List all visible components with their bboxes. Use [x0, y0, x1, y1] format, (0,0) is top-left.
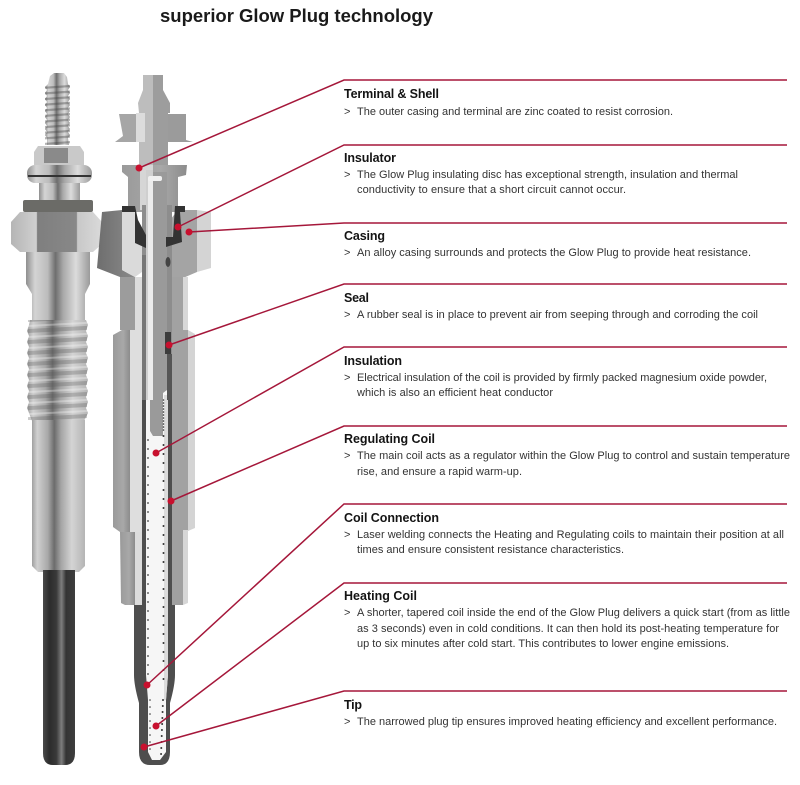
text block: Casing: Casing [344, 229, 385, 243]
text block: Seal: A rubber seal is in place to prevent air from seeping through and corroding the coil [357, 309, 758, 321]
lower body right [172, 530, 188, 605]
upper body left [120, 277, 142, 330]
rubber seal [165, 332, 171, 354]
threaded terminal stud [45, 73, 70, 145]
leader: Insulator [174, 145, 787, 230]
text block: Terminal & Shell [344, 87, 673, 118]
text block: Insulation: > [344, 372, 350, 384]
casing hex right [166, 210, 211, 278]
text block: Insulation: Electrical insulation of the coil is provided by firmly packed magnesium oxide powder, [357, 372, 767, 384]
text block: Heating Coil: up to six minutes after cold start. This contributes to lower engine emissions. [357, 638, 729, 650]
wide body left [113, 330, 142, 533]
text block: Insulation: Insulation [344, 354, 402, 368]
text block: Terminal & Shell: > [344, 106, 350, 118]
heating coil [150, 700, 163, 756]
leader: Casing [186, 223, 787, 236]
text block: Heating Coil: > [344, 607, 350, 619]
heater tube wall [134, 400, 175, 765]
text block: Coil Connection [344, 511, 784, 556]
text block: Heating Coil: A shorter, tapered coil inside the end of the Glow Plug delivers a quick start (from as little [357, 607, 790, 619]
chrome body [26, 252, 90, 320]
upper body right [172, 277, 188, 330]
inner channel [142, 205, 172, 605]
leader: Regulating Coil [168, 426, 787, 504]
wide body right [172, 330, 195, 531]
text block: Terminal & Shell: The outer casing and terminal are zinc coated to resist corrosion. [357, 106, 673, 118]
text block: Heating Coil: as 3 seconds) even in cold conditions. It can then hold its post-heating temperature for [357, 623, 779, 635]
casing hex left [97, 210, 135, 277]
text block: Insulator: The Glow Plug insulating disc has exceptional strength, insulation and thermal [357, 169, 738, 181]
regulating coil [148, 400, 164, 680]
text block: Heating Coil [344, 589, 790, 650]
text block: Tip [344, 698, 777, 728]
text block: Seal: > [344, 309, 350, 321]
text block: Tip: The narrowed plug tip ensures improved heating efficiency and excellent performance. [357, 716, 777, 728]
o-ring [166, 257, 170, 267]
magnesium oxide powder fill [146, 390, 168, 760]
text block: Casing: An alloy casing surrounds and protects the Glow Plug to provide heat resistance. [357, 247, 751, 259]
title: superior Glow Plug technology [160, 5, 434, 26]
text block: Regulating Coil [344, 432, 790, 478]
external view of glow plug [11, 73, 102, 765]
leader: Tip [140, 691, 787, 750]
black heater tube [43, 570, 75, 765]
lower body left [120, 532, 142, 605]
text block: Insulation: which is also an efficient heat conductor [356, 387, 553, 399]
text block: Regulating Coil: Regulating Coil [344, 432, 435, 446]
leader: Heating Coil [152, 583, 787, 730]
neck [39, 183, 80, 201]
text block: Coil Connection: Laser welding connects the Heating and Regulating coils to maintain their position at all [357, 529, 784, 541]
collar [122, 165, 187, 212]
right inner wall [167, 354, 172, 400]
text block: Regulating Coil: rise, and ensure a rapid warm-up. [357, 466, 522, 478]
insulator disc right [166, 206, 185, 247]
dark ring [23, 200, 93, 212]
text block: Coil Connection: Coil Connection [344, 511, 439, 525]
insulator disc left [122, 206, 146, 248]
casing hex section light [122, 210, 142, 277]
text block: Terminal & Shell: Terminal & Shell [344, 87, 439, 101]
text block: Seal: Seal [344, 291, 369, 305]
text block: Insulation [344, 354, 767, 399]
text block: Insulator: Insulator [344, 151, 396, 165]
text block: Insulator [344, 151, 738, 196]
terminal top [138, 75, 170, 165]
left inner wall [142, 255, 146, 405]
hex body [11, 212, 102, 252]
text block: Insulator: > [344, 169, 350, 181]
text block: Coil Connection: > [344, 529, 350, 541]
leader: Seal [166, 284, 787, 348]
text block: Tip: > [344, 716, 350, 728]
powder shading strip [164, 395, 168, 700]
leader: Terminal & Shell [136, 80, 787, 172]
leader: Insulation [152, 347, 787, 456]
terminal nut section [115, 113, 193, 142]
text block: Casing: > [344, 247, 350, 259]
main thread [27, 320, 88, 421]
text block: Seal [344, 291, 758, 321]
washer [27, 165, 92, 183]
text block: Heating Coil: Heating Coil [344, 589, 417, 603]
text block: Regulating Coil: > [344, 450, 350, 462]
text block: Casing [344, 229, 751, 259]
leader: Coil Connection [144, 504, 787, 688]
text block: Insulator: conductivity to ensure that a short circuit cannot occur. [357, 184, 626, 196]
text block: Regulating Coil: The main coil acts as a regulator within the Glow Plug to control and sustain temperature [357, 450, 790, 462]
smooth shaft [32, 420, 85, 572]
text block: Coil Connection: times and ensure consistent resistance characteristics. [357, 544, 624, 556]
cross-section of glow plug [97, 75, 211, 765]
text block: Tip: Tip [344, 698, 362, 712]
center electrode [146, 170, 167, 436]
terminal nut [34, 146, 84, 165]
